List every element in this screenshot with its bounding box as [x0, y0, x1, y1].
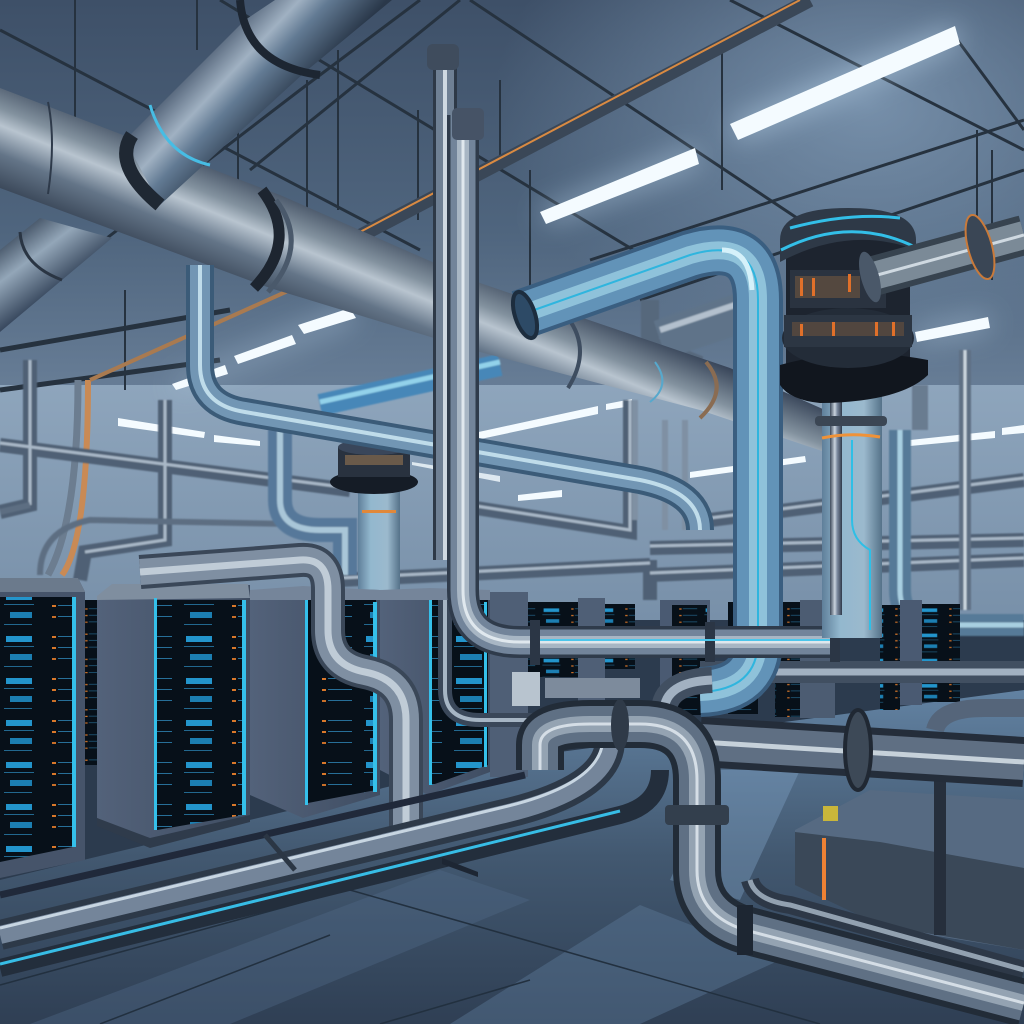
vertical pipe front [427, 44, 459, 560]
floor support bracket [442, 858, 478, 877]
background wall pipes [0, 290, 1024, 625]
server rack 3 [250, 586, 380, 818]
ceiling lights [118, 26, 1024, 501]
curved silver pipes over racks [140, 560, 406, 845]
generator unit lower right [795, 740, 1024, 950]
upper left diagonal duct [125, 0, 392, 205]
server rack 1 [0, 578, 85, 878]
server rack 2 [97, 584, 250, 848]
light halos [174, 26, 990, 390]
big overhead duct [0, 88, 825, 452]
ceiling grid and conduits [0, 0, 1024, 575]
far pump column [330, 439, 418, 590]
glowing glass pipe [508, 250, 758, 692]
small pipe behind foreground pipe [935, 708, 1024, 730]
pipe from tower top to the right [855, 212, 1024, 304]
foreground pipe right [700, 710, 1024, 790]
silver pipe with main horizontal run [452, 108, 840, 665]
server rack 4 [380, 588, 490, 795]
blue coolant pipe left [200, 265, 700, 530]
background: ceiling [0, 0, 1024, 420]
floor pipe bundle [0, 740, 660, 968]
lower left duct [0, 218, 112, 332]
back server racks [84, 592, 960, 777]
foreground elbow pipe [540, 699, 1024, 1003]
background: floor [0, 690, 1024, 1024]
background: back wall [0, 385, 1024, 620]
short elbow joining the glass pipe [664, 680, 712, 712]
pump tower right [780, 208, 928, 638]
lower middle pipes [445, 600, 1024, 720]
